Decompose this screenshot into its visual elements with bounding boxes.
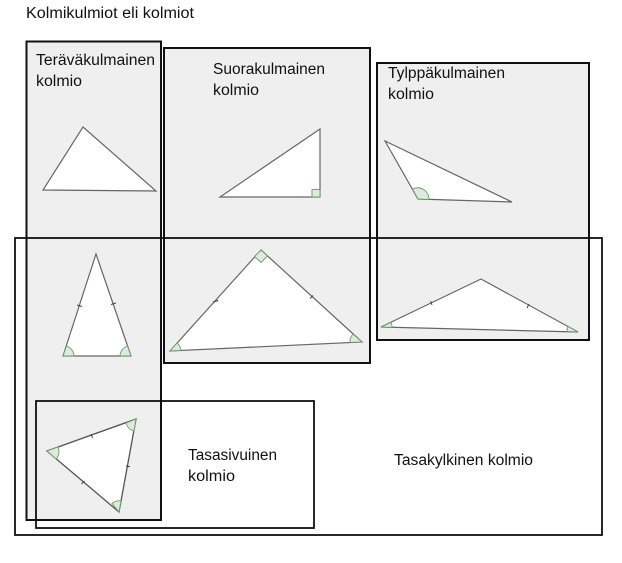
- icon: obtuse triangle: [385, 141, 512, 202]
- label: equilateral: Tasasivuinen: [188, 447, 277, 464]
- icon: acute isosceles triangle: [63, 254, 131, 356]
- heading: obtuse: kolmio: [388, 86, 434, 103]
- box: isosceles group: [15, 238, 602, 535]
- panel: obtuse triangles: [377, 63, 589, 340]
- box: obtuse outline: [377, 63, 589, 340]
- box: acute outline: [26, 42, 161, 520]
- heading: right: Suorakulmainen: [213, 61, 325, 78]
- heading: acute: Teräväkulmainen: [36, 52, 155, 69]
- icon: right isosceles triangle: [170, 250, 362, 351]
- heading: obtuse: Tylppäkulmainen: [388, 65, 505, 82]
- heading: acute: [36, 52, 155, 90]
- label: isosceles: Tasakylkinen kolmio: [394, 452, 533, 469]
- icon: acute triangle: [43, 127, 156, 191]
- panel: acute triangles: [26, 42, 161, 520]
- label: equilateral: kolmio: [188, 468, 235, 485]
- box: equilateral group: [36, 401, 314, 528]
- heading: acute: kolmio: [36, 73, 82, 90]
- heading: obtuse: [388, 65, 505, 103]
- icon: equilateral triangle: [47, 419, 136, 512]
- box: right outline: [164, 48, 370, 363]
- icon: obtuse isosceles triangle: [381, 279, 578, 332]
- label: equilateral: [188, 447, 277, 485]
- heading: right: kolmio: [213, 82, 259, 99]
- icon: right triangle: [220, 129, 320, 197]
- heading: right: [213, 61, 325, 99]
- title: Kolmikulmiot eli kolmiot: [26, 5, 195, 22]
- panel: right triangles: [164, 48, 370, 363]
